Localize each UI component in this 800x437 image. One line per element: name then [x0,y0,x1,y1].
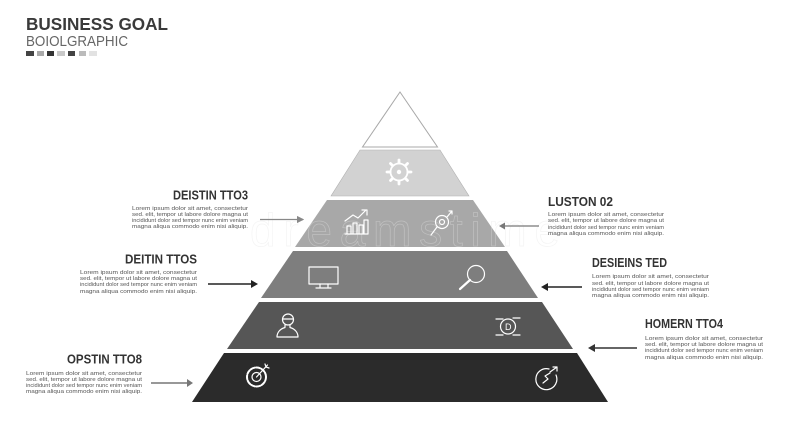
callout: OPSTIN TTO8: incididunt dolor sed tempor nunc enim veniam [26,383,142,389]
callout: HOMERN TTO4: sed. elit, tempor ut labore dolore magna ut [645,342,764,348]
callout: DESIEINS TED: incididunt dolor sed tempor nunc enim veniam [592,287,709,293]
callout: DEITIN TTOS: magna aliqua commodo enim nisi aliquip. [80,289,198,295]
arrow: to tier 6 left [151,379,193,387]
tier 4 [261,251,538,298]
callout: OPSTIN TTO8: OPSTIN TTO8 [67,352,142,366]
callout: HOMERN TTO4: HOMERN TTO4 [645,316,724,331]
callout: HOMERN TTO4: incididunt dolor sed tempor nunc enim veniam [645,348,763,354]
callout: HOMERN TTO4 [645,316,764,361]
callout: HOMERN TTO4: Lorem ipsum dolor sit amet, consectetur [645,336,763,342]
callout: DEISTIN TTO3: Lorem ipsum dolor sit amet, consectetur [132,206,248,212]
arrow: to tier 3 right [499,222,539,230]
callout: DEITIN TTOS: DEITIN TTOS [125,252,197,266]
icon: person [277,314,298,337]
callout: DESIEINS TED: Lorem ipsum dolor sit amet, consectetur [592,274,709,280]
subtitle: BOIOLGRAPHIC [26,34,128,50]
tier 3 [295,200,505,247]
arrow: to tier 4 left [208,280,258,288]
callout: HOMERN TTO4: magna aliqua commodo enim nisi aliquip. [645,355,764,361]
icon: D coin: D [505,322,512,332]
callout: OPSTIN TTO8: magna aliqua commodo enim nisi aliquip. [26,389,143,395]
callout: DEISTIN TTO3: DEISTIN TTO3 [173,188,248,202]
callout: DEISTIN TTO3: sed. elit, tempor ut labore dolore magna ut [132,212,249,218]
tier 5 [227,302,573,349]
icon: monitor [309,267,338,288]
callout: DESIEINS TED [592,255,710,299]
colour swatches [26,51,97,56]
callout: DESIEINS TED: magna aliqua commodo enim nisi aliquip. [592,293,710,299]
callout: OPSTIN TTO8: Lorem ipsum dolor sit amet, consectetur [26,371,142,377]
callout: DEITIN TTOS: incididunt dolor sed tempor nunc enim veniam [80,282,197,288]
arrow: to tier 5 right [588,344,637,352]
icon: magnifier [460,266,484,289]
callout: OPSTIN TTO8 [26,352,143,395]
icon: circle with arrow [536,367,557,390]
callout: LUSTON 02: Lorem ipsum dolor sit amet, consectetur [548,212,664,218]
callout: DESIEINS TED: DESIEINS TED [592,255,667,270]
callout: DEISTIN TTO3: incididunt dolor sed tempor nunc enim veniam [132,218,248,224]
callout: DEISTIN TTO3 [132,188,249,230]
tier 1: apex [362,92,438,147]
arrow: to tier 3 left [260,218,303,220]
icon: gear [387,160,411,184]
callout: LUSTON 02 [548,194,665,237]
callout: LUSTON 02: sed. elit, tempor ut labore dolore magna ut [548,218,665,224]
callout: LUSTON 02: LUSTON 02 [548,194,613,209]
callout: LUSTON 02: incididunt dolor sed tempor nunc enim veniam [548,225,664,231]
tier 6 [192,353,608,402]
title: BUSINESS GOAL [26,14,168,34]
callout: DEISTIN TTO3: magna aliqua commodo enim nisi aliquip. [132,224,249,230]
callout: DEITIN TTOS [80,252,198,295]
icon: bar chart with arrow [345,210,368,234]
pyramid [192,92,608,402]
icon: gear with target [247,364,269,386]
watermark: dreamstime [250,204,560,256]
arrow: to tier 4 right [541,283,582,291]
callout: LUSTON 02: magna aliqua commodo enim nisi aliquip. [548,231,665,237]
icon: D coin [496,318,520,335]
callout: OPSTIN TTO8: sed. elit, tempor ut labore dolore magna ut [26,377,143,383]
tier 2 [331,150,469,196]
callout: DEITIN TTOS: Lorem ipsum dolor sit amet, consectetur [80,270,197,276]
icon: target with arrow [431,211,452,235]
callout: DESIEINS TED: sed. elit, tempor ut labore dolore magna ut [592,281,710,287]
callout: DEITIN TTOS: sed. elit, tempor ut labore dolore magna ut [80,276,198,282]
